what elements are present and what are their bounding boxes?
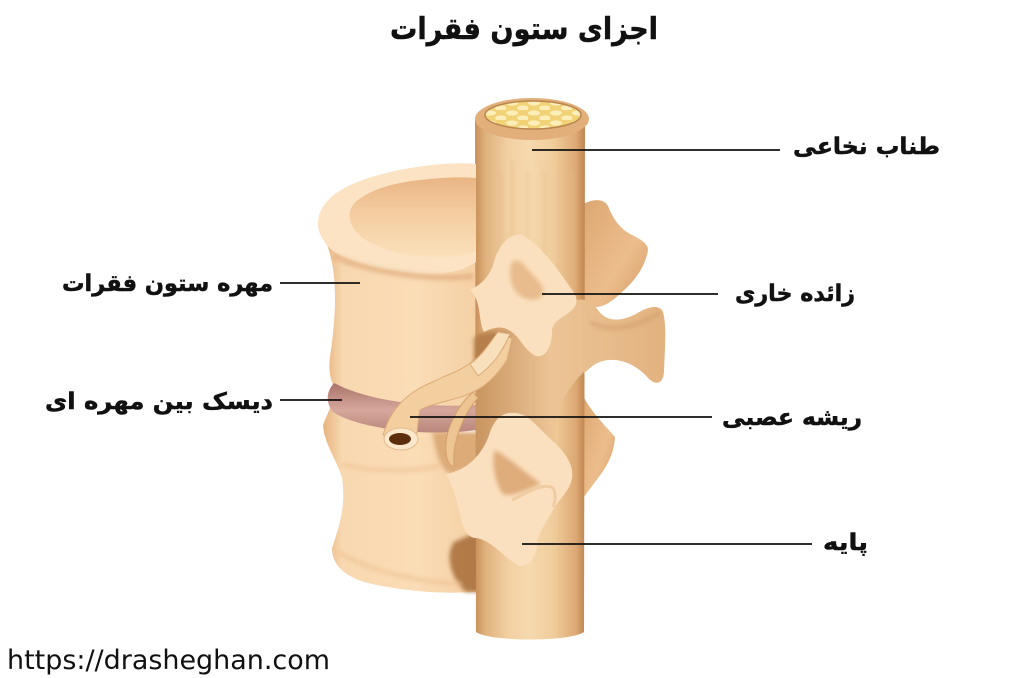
lower body highlights xyxy=(338,464,462,584)
thin branch xyxy=(446,392,478,466)
label: disc: دیسک بین مهره ای xyxy=(45,389,273,415)
lower facet hollow xyxy=(493,450,541,495)
rim outer xyxy=(318,163,476,274)
label: pedicle: پایه xyxy=(823,530,868,556)
lower facet curved ridge xyxy=(512,486,555,507)
vertebra bowl xyxy=(350,177,476,257)
label: nerve root: ریشه عصبی xyxy=(722,405,862,431)
label: spinous process: زائده خاری xyxy=(735,281,855,307)
leader: spinous process xyxy=(542,293,718,295)
leader: vertebra xyxy=(280,282,360,284)
cord fibres xyxy=(500,160,572,350)
lower vertebra body xyxy=(323,408,480,593)
dark gap under upper facet xyxy=(474,332,510,368)
rim under-shadow xyxy=(334,256,474,278)
shadow beside nerve root xyxy=(432,432,480,474)
cord top rim xyxy=(475,98,589,140)
cord shaft xyxy=(475,120,585,640)
intervertebral disc xyxy=(328,383,476,433)
cord cross-section xyxy=(485,101,581,129)
root lumen xyxy=(389,433,411,445)
website url: https://drasheghan.com xyxy=(7,645,330,676)
leader lines xyxy=(280,150,812,544)
title: اجزای ستون فقرات xyxy=(390,12,658,47)
root opening xyxy=(384,428,418,450)
upper facet bulge xyxy=(470,235,576,356)
lower vertebra shading xyxy=(450,530,482,592)
label: vertebra: مهره ستون فقرات xyxy=(62,271,273,297)
label: spinal cord: طناب نخاعی xyxy=(793,134,940,160)
spinal cord xyxy=(475,98,589,640)
cord lower strip xyxy=(556,372,584,520)
leader: spinal cord xyxy=(532,149,780,151)
upper vertebra body xyxy=(324,238,478,420)
spine diagram xyxy=(318,98,665,640)
back spinous process, upper xyxy=(580,200,648,307)
main root tube xyxy=(383,336,512,435)
lower facet bulge xyxy=(446,413,572,566)
leader: pedicle xyxy=(522,543,812,545)
second strand xyxy=(470,332,510,376)
arch edge shadow xyxy=(590,312,660,328)
nerve root xyxy=(383,332,512,466)
upper facet hollow xyxy=(510,260,544,300)
upper vertebra rim xyxy=(318,163,476,274)
neural arch and transverse process xyxy=(476,299,665,470)
leader: nerve root xyxy=(410,416,712,418)
back spinous process, lower xyxy=(582,393,615,498)
leader: disc xyxy=(280,399,342,401)
